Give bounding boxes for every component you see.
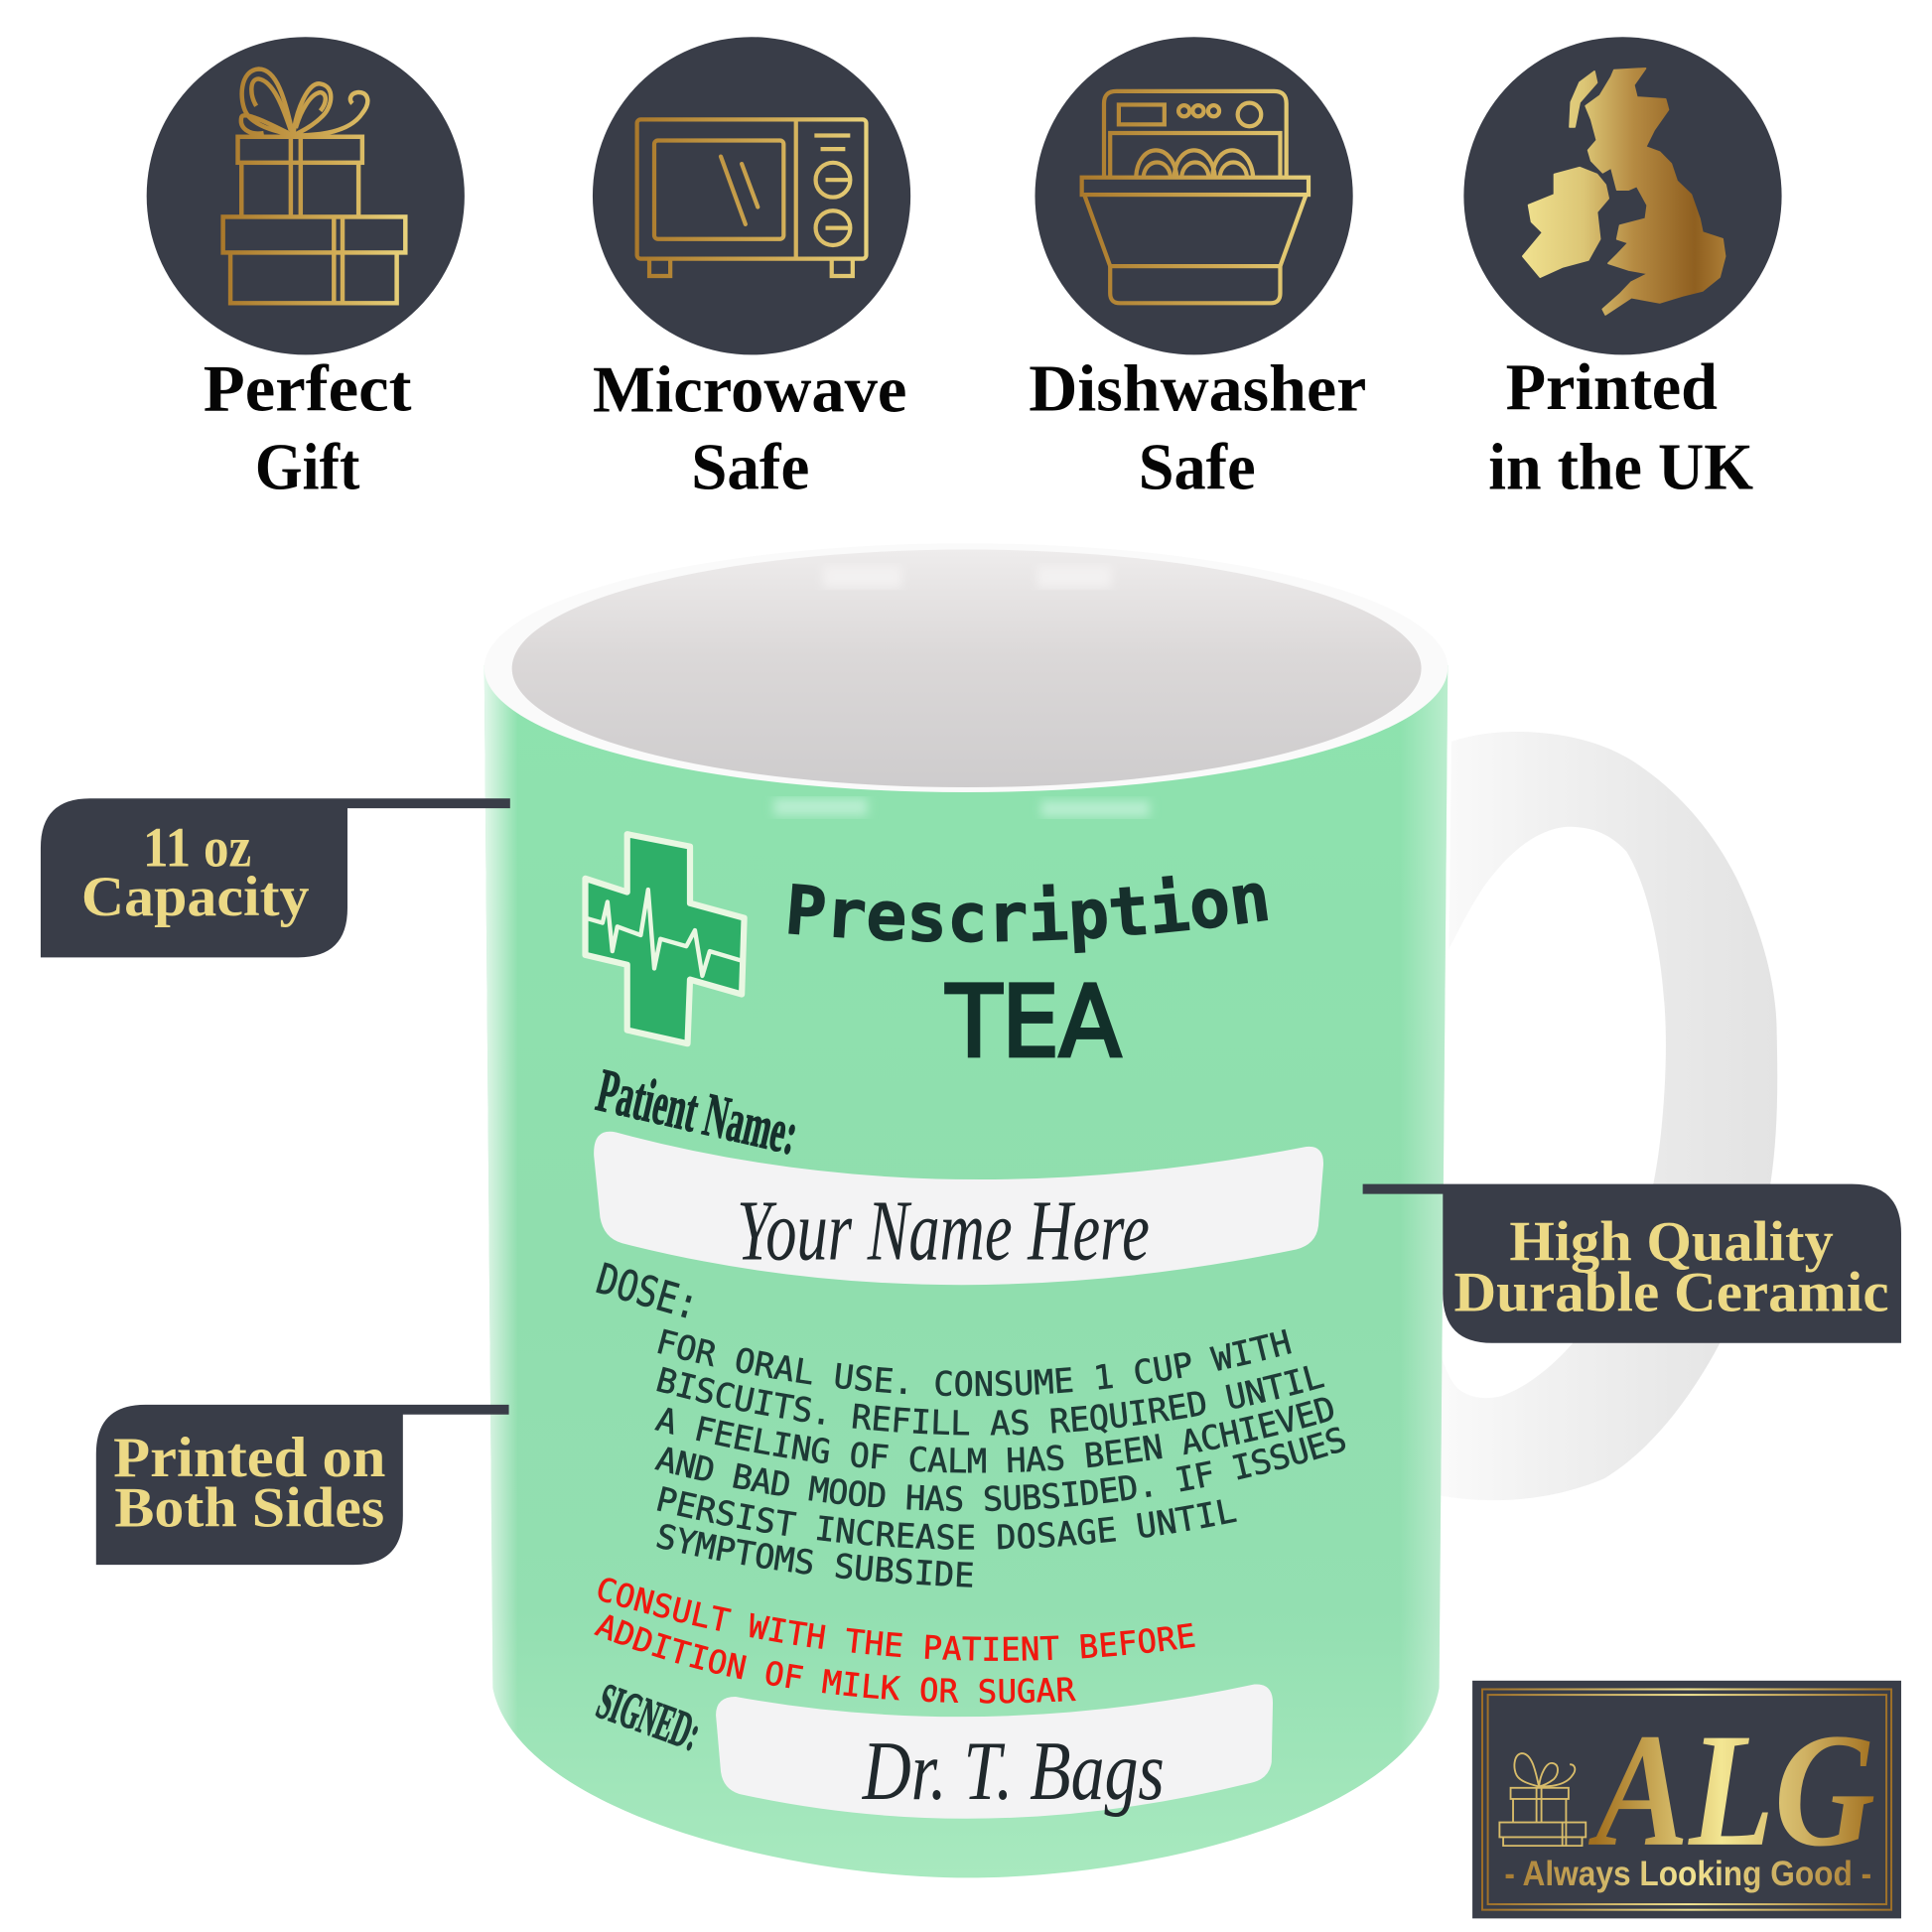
heading: Printed in the UK <box>1488 350 1753 504</box>
script: Your Name Here: Your Name Here <box>737 1182 1150 1278</box>
mug body <box>484 543 1448 1877</box>
heading: Printed in the UK: in the UK <box>1488 431 1753 504</box>
icon: dishwasher <box>1082 91 1309 303</box>
heading: Microwave Safe <box>593 353 906 504</box>
callout: high quality durable ceramic: Durable Ceramic <box>1453 1261 1889 1323</box>
callout: printed on both sides: Printed on <box>113 1427 385 1489</box>
icon: small gift boxes <box>1499 1753 1586 1846</box>
heading: Dishwasher Safe: Dishwasher <box>1029 351 1366 425</box>
callout: high quality durable ceramic <box>1363 1184 1901 1343</box>
signature field <box>716 1684 1273 1819</box>
heading: Microwave Safe: Safe <box>691 431 809 504</box>
warning text <box>594 1578 1195 1704</box>
label: DOSE: DOSE: <box>591 1254 704 1329</box>
heading: Perfect Gift <box>204 351 412 504</box>
icon: microwave badge <box>593 37 910 354</box>
icon: dishwasher badge <box>1035 37 1353 354</box>
heading: Printed in the UK: Printed <box>1506 350 1718 424</box>
icon: gift boxes <box>223 69 405 303</box>
icon: green medical cross <box>586 834 745 1043</box>
dose instructions: BISCUITS. REFILL AS REQUIRED UNTIL <box>656 1366 1324 1436</box>
script: Dr. T. Bags: Dr. T. Bags <box>862 1725 1165 1818</box>
title: TEA: TEA <box>945 966 1121 1080</box>
title: Prescription: Prescription <box>788 876 1269 953</box>
label: SIGNED: SIGNED: <box>590 1673 708 1762</box>
callout: printed on both sides: Both Sides <box>114 1477 384 1540</box>
heading: Dishwasher Safe <box>1029 351 1366 504</box>
logo monogram: ALG: ALG <box>1587 1701 1875 1880</box>
icon: UK map badge <box>1463 37 1782 354</box>
dose instructions: AND BAD MOOD HAS SUBSIDED. IF ISSUES <box>654 1428 1346 1511</box>
heading: Microwave Safe: Microwave <box>593 353 906 427</box>
icon: microwave <box>637 119 866 276</box>
rim <box>484 543 1448 792</box>
glaze reflections <box>773 798 1150 817</box>
callout: high quality durable ceramic: High Quality <box>1509 1211 1834 1274</box>
logo tagline: - Always Looking Good - <box>1504 1856 1871 1893</box>
heading: Dishwasher Safe: Safe <box>1139 431 1256 504</box>
mug handle <box>1430 732 1777 1500</box>
callout: 11 oz capacity <box>41 798 510 957</box>
label: Patient Name: Patient Name: <box>591 1056 804 1168</box>
dose instructions: SYMPTOMS SUBSIDE <box>656 1524 973 1587</box>
mug interior <box>512 550 1422 787</box>
heading: Perfect Gift: Gift <box>255 431 360 504</box>
callout: 11 oz capacity: Capacity <box>81 866 310 928</box>
callout: 11 oz capacity: 11 oz <box>143 816 251 879</box>
logo: Always Looking Good <box>1472 1681 1901 1918</box>
interior reflections <box>823 566 1111 588</box>
warning text: CONSULT WITH THE PATIENT BEFORE <box>598 1578 1195 1661</box>
callout: printed on both sides <box>96 1405 509 1565</box>
dose instructions: FOR ORAL USE. CONSUME 1 CUP WITH <box>657 1328 1292 1396</box>
dose instructions: A FEELING OF CALM HAS BEEN ACHIEVED <box>654 1398 1333 1473</box>
icon: UK and Ireland map <box>1523 69 1725 315</box>
name field <box>594 1132 1323 1285</box>
dose instructions <box>654 1328 1346 1587</box>
warning text: ADDITION OF MILK OR SUGAR <box>594 1614 1076 1704</box>
dose instructions: PERSIST INCREASE DOSAGE UNTIL <box>657 1486 1237 1550</box>
heading: Perfect Gift: Perfect <box>204 351 412 425</box>
icon: perfect gift badge <box>147 37 465 354</box>
